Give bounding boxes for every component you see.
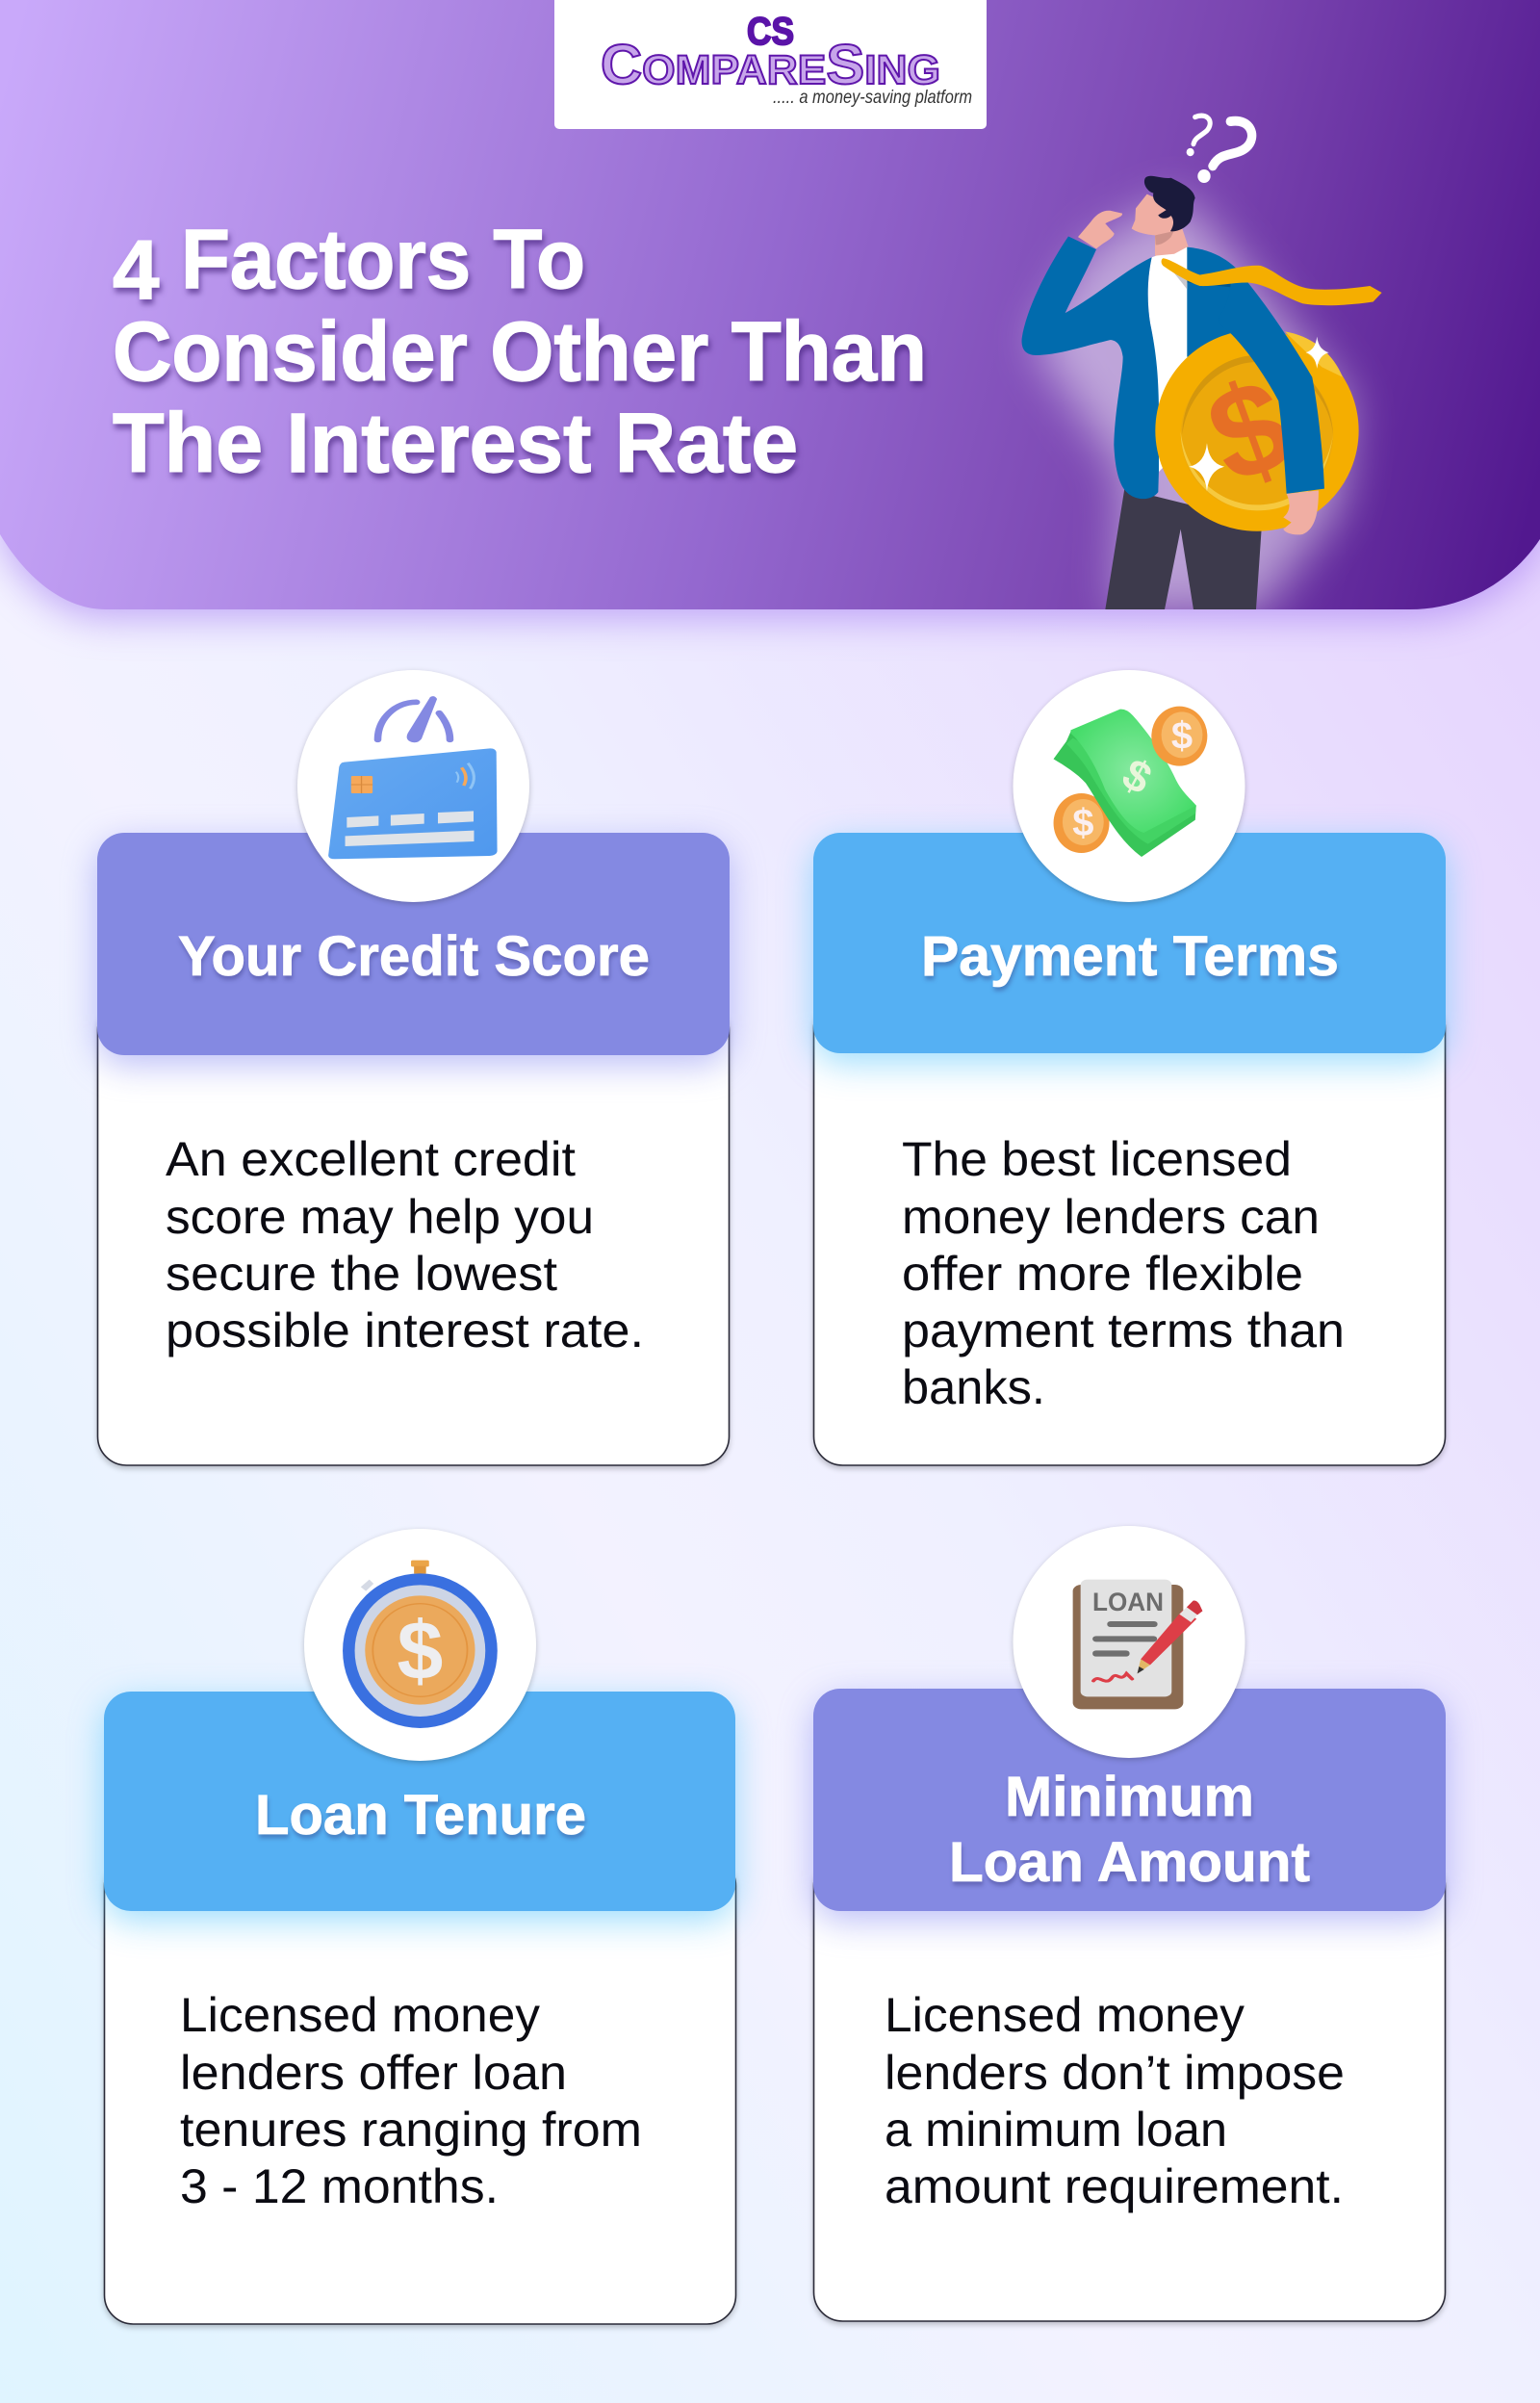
icon badge xyxy=(304,1529,536,1761)
card body xyxy=(814,999,1446,1465)
body text: banks. xyxy=(902,1360,1045,1414)
question marks xyxy=(1187,116,1252,183)
header glow xyxy=(97,842,730,1065)
body text: payment terms than xyxy=(902,1304,1345,1357)
heading: Your Credit Score xyxy=(178,925,650,988)
logo: CompareSing: COMPARESING xyxy=(601,34,940,96)
body text: a minimum loan xyxy=(885,2103,1227,2157)
title xyxy=(113,213,927,490)
heading: Loan Amount xyxy=(949,1831,1310,1894)
body text: amount requirement. xyxy=(885,2159,1344,2213)
icon: credit card with gauge xyxy=(328,696,498,859)
icon: stopwatch with dollar xyxy=(343,1561,498,1728)
illustration: thinking man holding a coin: $ xyxy=(1190,349,1308,511)
heading: Loan Tenure xyxy=(255,1784,586,1847)
title: 4 xyxy=(113,223,159,317)
holding hand xyxy=(1283,490,1319,534)
logo: CompareSing xyxy=(554,0,987,129)
icon badge xyxy=(297,670,529,902)
body text: offer more flexible xyxy=(902,1247,1303,1301)
card body xyxy=(104,1857,735,2324)
body text: possible interest rate. xyxy=(166,1304,644,1357)
neck and face xyxy=(1155,228,1189,257)
body text: The best licensed xyxy=(902,1132,1292,1186)
header band xyxy=(813,833,1446,1053)
coin xyxy=(1155,330,1359,531)
icon: money and coins: $ xyxy=(1072,802,1093,844)
body text xyxy=(166,1132,644,1357)
header glow xyxy=(813,1698,1446,1921)
card body xyxy=(814,1857,1446,2321)
arm over the coin xyxy=(1230,268,1324,494)
jacket left and raised arm xyxy=(1022,236,1159,499)
title: Consider Other Than xyxy=(113,305,927,399)
icon: loan document and pencil: LOAN xyxy=(1092,1588,1164,1616)
icon: stopwatch with dollar: $ xyxy=(397,1605,443,1697)
header band xyxy=(104,1692,735,1911)
heading: Minimum xyxy=(1005,1766,1254,1828)
body text: 3 - 12 months. xyxy=(180,2159,499,2213)
body text: Licensed money xyxy=(885,1988,1245,2042)
necktie xyxy=(1162,258,1382,305)
title: Factors To xyxy=(181,213,585,306)
heading xyxy=(949,1766,1310,1894)
body text: money lenders can xyxy=(902,1190,1320,1244)
panel: your credit score xyxy=(97,670,730,1465)
body text xyxy=(902,1132,1345,1414)
header glow xyxy=(104,1701,735,1921)
shirt xyxy=(1147,246,1188,472)
icon: money and coins xyxy=(1054,707,1207,857)
logo: CompareSing: ..... a money-saving platform xyxy=(773,88,972,108)
panel: minimum loan amount xyxy=(813,1526,1446,2321)
body text: score may help you xyxy=(166,1190,594,1244)
body text: An excellent credit xyxy=(166,1132,576,1186)
body text xyxy=(885,1988,1345,2213)
illustration: thinking man holding a coin xyxy=(1022,116,1382,613)
hair xyxy=(1144,176,1195,231)
icon: money and coins: $ xyxy=(1115,748,1160,804)
sparkles xyxy=(1306,337,1329,369)
body text: tenures ranging from xyxy=(180,2103,642,2157)
icon badge xyxy=(1013,1526,1245,1758)
body text: lenders offer loan xyxy=(180,2046,567,2100)
body text: secure the lowest xyxy=(166,1247,557,1301)
body text: lenders don’t impose xyxy=(885,2046,1345,2100)
body text xyxy=(180,1988,642,2213)
hero banner xyxy=(0,0,1540,619)
panel: loan tenure xyxy=(104,1529,735,2324)
header glow xyxy=(813,842,1446,1063)
logo: CompareSing: CS xyxy=(747,11,794,53)
header band xyxy=(813,1689,1446,1911)
jacket right torso xyxy=(1187,246,1236,357)
title: The Interest Rate xyxy=(113,397,798,490)
icon: loan document and pencil xyxy=(1073,1580,1202,1709)
trousers xyxy=(1105,489,1262,609)
heading: Payment Terms xyxy=(921,925,1339,988)
header band xyxy=(97,833,730,1055)
icon: money and coins: $ xyxy=(1171,714,1193,757)
panel: payment terms xyxy=(813,670,1446,1465)
card body xyxy=(98,1001,730,1465)
body text: Licensed money xyxy=(180,1988,540,2042)
icon badge xyxy=(1013,670,1245,902)
raised hand xyxy=(1078,211,1122,248)
